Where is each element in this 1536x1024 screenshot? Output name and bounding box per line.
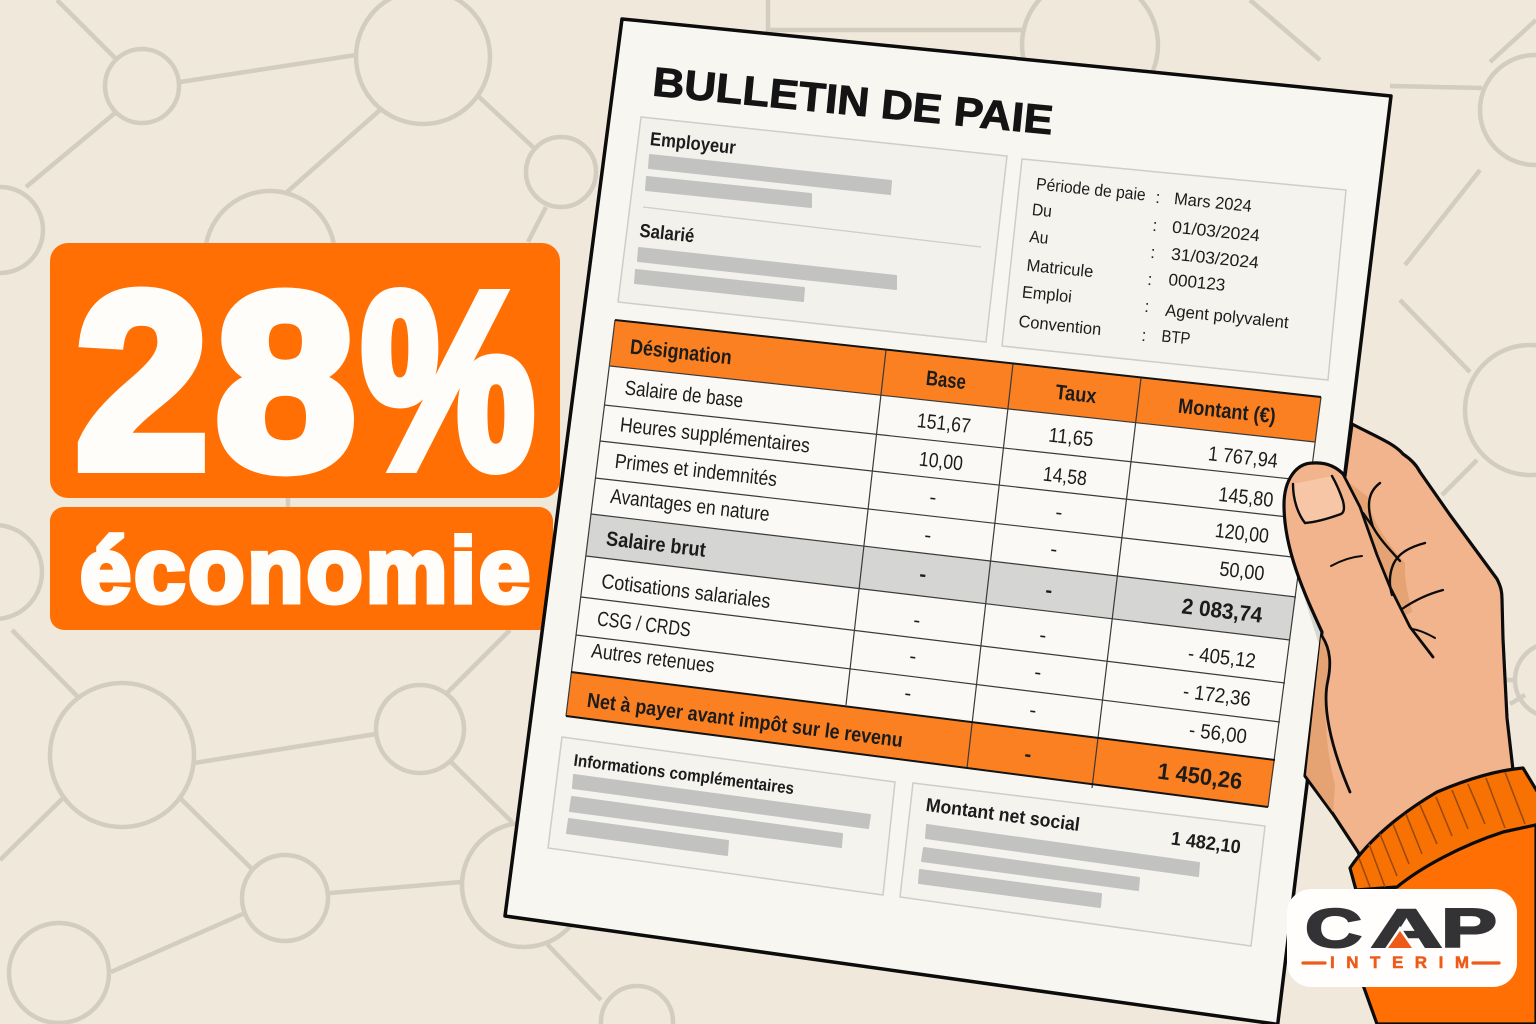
logo dashes [1303,961,1499,965]
table rows: 14,58 [1042,463,1088,490]
table header: Base [925,367,967,394]
panel: pay period information: : [1155,188,1161,207]
table rows: - [1054,501,1064,524]
big number 28 and percent sign: % [361,241,535,521]
CAP Interim logo [1287,889,1517,987]
table rows: - [903,682,913,705]
table rows: - [1038,624,1048,647]
big number 28 and percent sign [75,241,535,522]
orange sleeve [1340,768,1536,1024]
payslip document [505,19,1391,1024]
table rows: 10,00 [918,448,964,475]
redacted lines [635,155,896,301]
panel: pay period information: Période de paie [1035,174,1147,205]
shaded palm edge [1306,636,1335,812]
label net social: Montant net social [925,795,1081,836]
panel: pay period information: : [1147,270,1153,289]
big number 28 and percent sign: 2 [75,241,209,520]
redacted lines [567,775,870,855]
table rows: Cotisations salariales [600,570,772,613]
panel: économie badge [50,507,553,630]
logo orange triangle [1388,931,1412,948]
panel: pay period information: : [1152,216,1158,235]
paper shadow near thumb [1298,577,1322,645]
label informations: Informations complémentaires [573,751,795,798]
panel: pay period information: BTP [1161,327,1191,348]
table rows: - [923,524,933,547]
table header: Taux [1054,381,1098,408]
panel: pay period information: Au [1029,227,1049,248]
table rows: 1 450,26 [1156,758,1244,794]
table rows: CSG / CRDS [596,607,692,642]
hand holding the document [1284,424,1530,880]
table rows: - [908,645,918,668]
table rows: Primes et indemnités [614,450,778,491]
panel: pay period information: Du [1031,200,1053,221]
table header: Montant (€) [1177,395,1277,428]
table rows: 145,80 [1217,483,1275,512]
redacted lines [919,825,1199,907]
big number 28 and percent sign: 8 [215,243,356,522]
logo letters CAP: A [1370,897,1443,959]
table rows: 50,00 [1218,557,1266,586]
table rows: - [1028,699,1038,722]
panel: pay period information: Emploi [1021,283,1073,306]
panel: pay period information: Matricule [1026,256,1094,281]
thumb and finger lines [1322,474,1443,792]
panel: 28% badge [50,241,560,522]
table rows: - [1033,661,1043,684]
table rows [586,377,1279,794]
cuff ribs [1359,772,1525,887]
panel: pay period information: : [1141,326,1147,345]
table rows: 151,67 [916,409,972,438]
panel: pay period information: Agent polyvalent [1164,301,1290,332]
knit cuff [1350,768,1536,890]
table rows: - 56,00 [1188,718,1248,748]
label employeur: Employeur [649,129,737,159]
table rows: - [1023,743,1033,766]
table rows: - 172,36 [1182,680,1252,711]
panel: pay period information: Convention [1018,312,1102,339]
panel: pay period information [1002,159,1346,380]
table rows: 2 083,74 [1180,593,1264,628]
table rows: Heures supplémentaires [619,413,811,458]
paper sheet [505,19,1391,1024]
table header: Désignation [629,336,733,369]
table rows: 120,00 [1214,519,1270,548]
table rows: Autres retenues [590,639,716,678]
word économie: économie [80,520,530,622]
panel: pay period information: 000123 [1168,270,1226,295]
table header [629,336,1277,428]
logo letters CAP [1305,897,1497,959]
payslip table [566,320,1321,807]
table rows: Salaire brut [605,527,707,562]
title: BULLETIN DE PAIE [651,58,1055,144]
table rows: - 405,12 [1187,642,1257,673]
label salarié: Salarié [638,221,695,247]
hand outline and skin [1284,424,1530,880]
panel: pay period information: 31/03/2024 [1170,245,1260,272]
shaded fingers [1347,481,1412,616]
table rows: Avantages en nature [609,485,771,526]
panel: pay period information: : [1150,243,1156,262]
logo word INTERIM: INTERIM [1330,953,1469,972]
panel: employeur and salarié [618,117,1007,342]
logo letters CAP: P [1441,897,1497,959]
table rows: Salaire de base [624,377,744,412]
table rows: Net à payer avant impôt sur le revenu [586,689,904,752]
panel: pay period information: : [1144,297,1150,316]
thumbnail [1293,476,1344,523]
table rows: - [1049,538,1059,561]
table rows: - [918,563,928,586]
panel: montant net social [900,783,1265,946]
logo letters CAP: C [1305,897,1362,959]
panel: pay period information: Mars 2024 [1173,189,1253,216]
logo A cut-out [1384,926,1416,950]
value net social: 1 482,10 [1170,829,1242,858]
table rows: - [1044,579,1054,602]
panel: informations complémentaires [548,737,895,895]
table rows: 11,65 [1047,424,1095,451]
table rows: - [928,486,938,509]
panel: pay period information: 01/03/2024 [1171,218,1261,245]
table rows: 1 767,94 [1207,442,1279,473]
table rows: - [912,609,922,632]
